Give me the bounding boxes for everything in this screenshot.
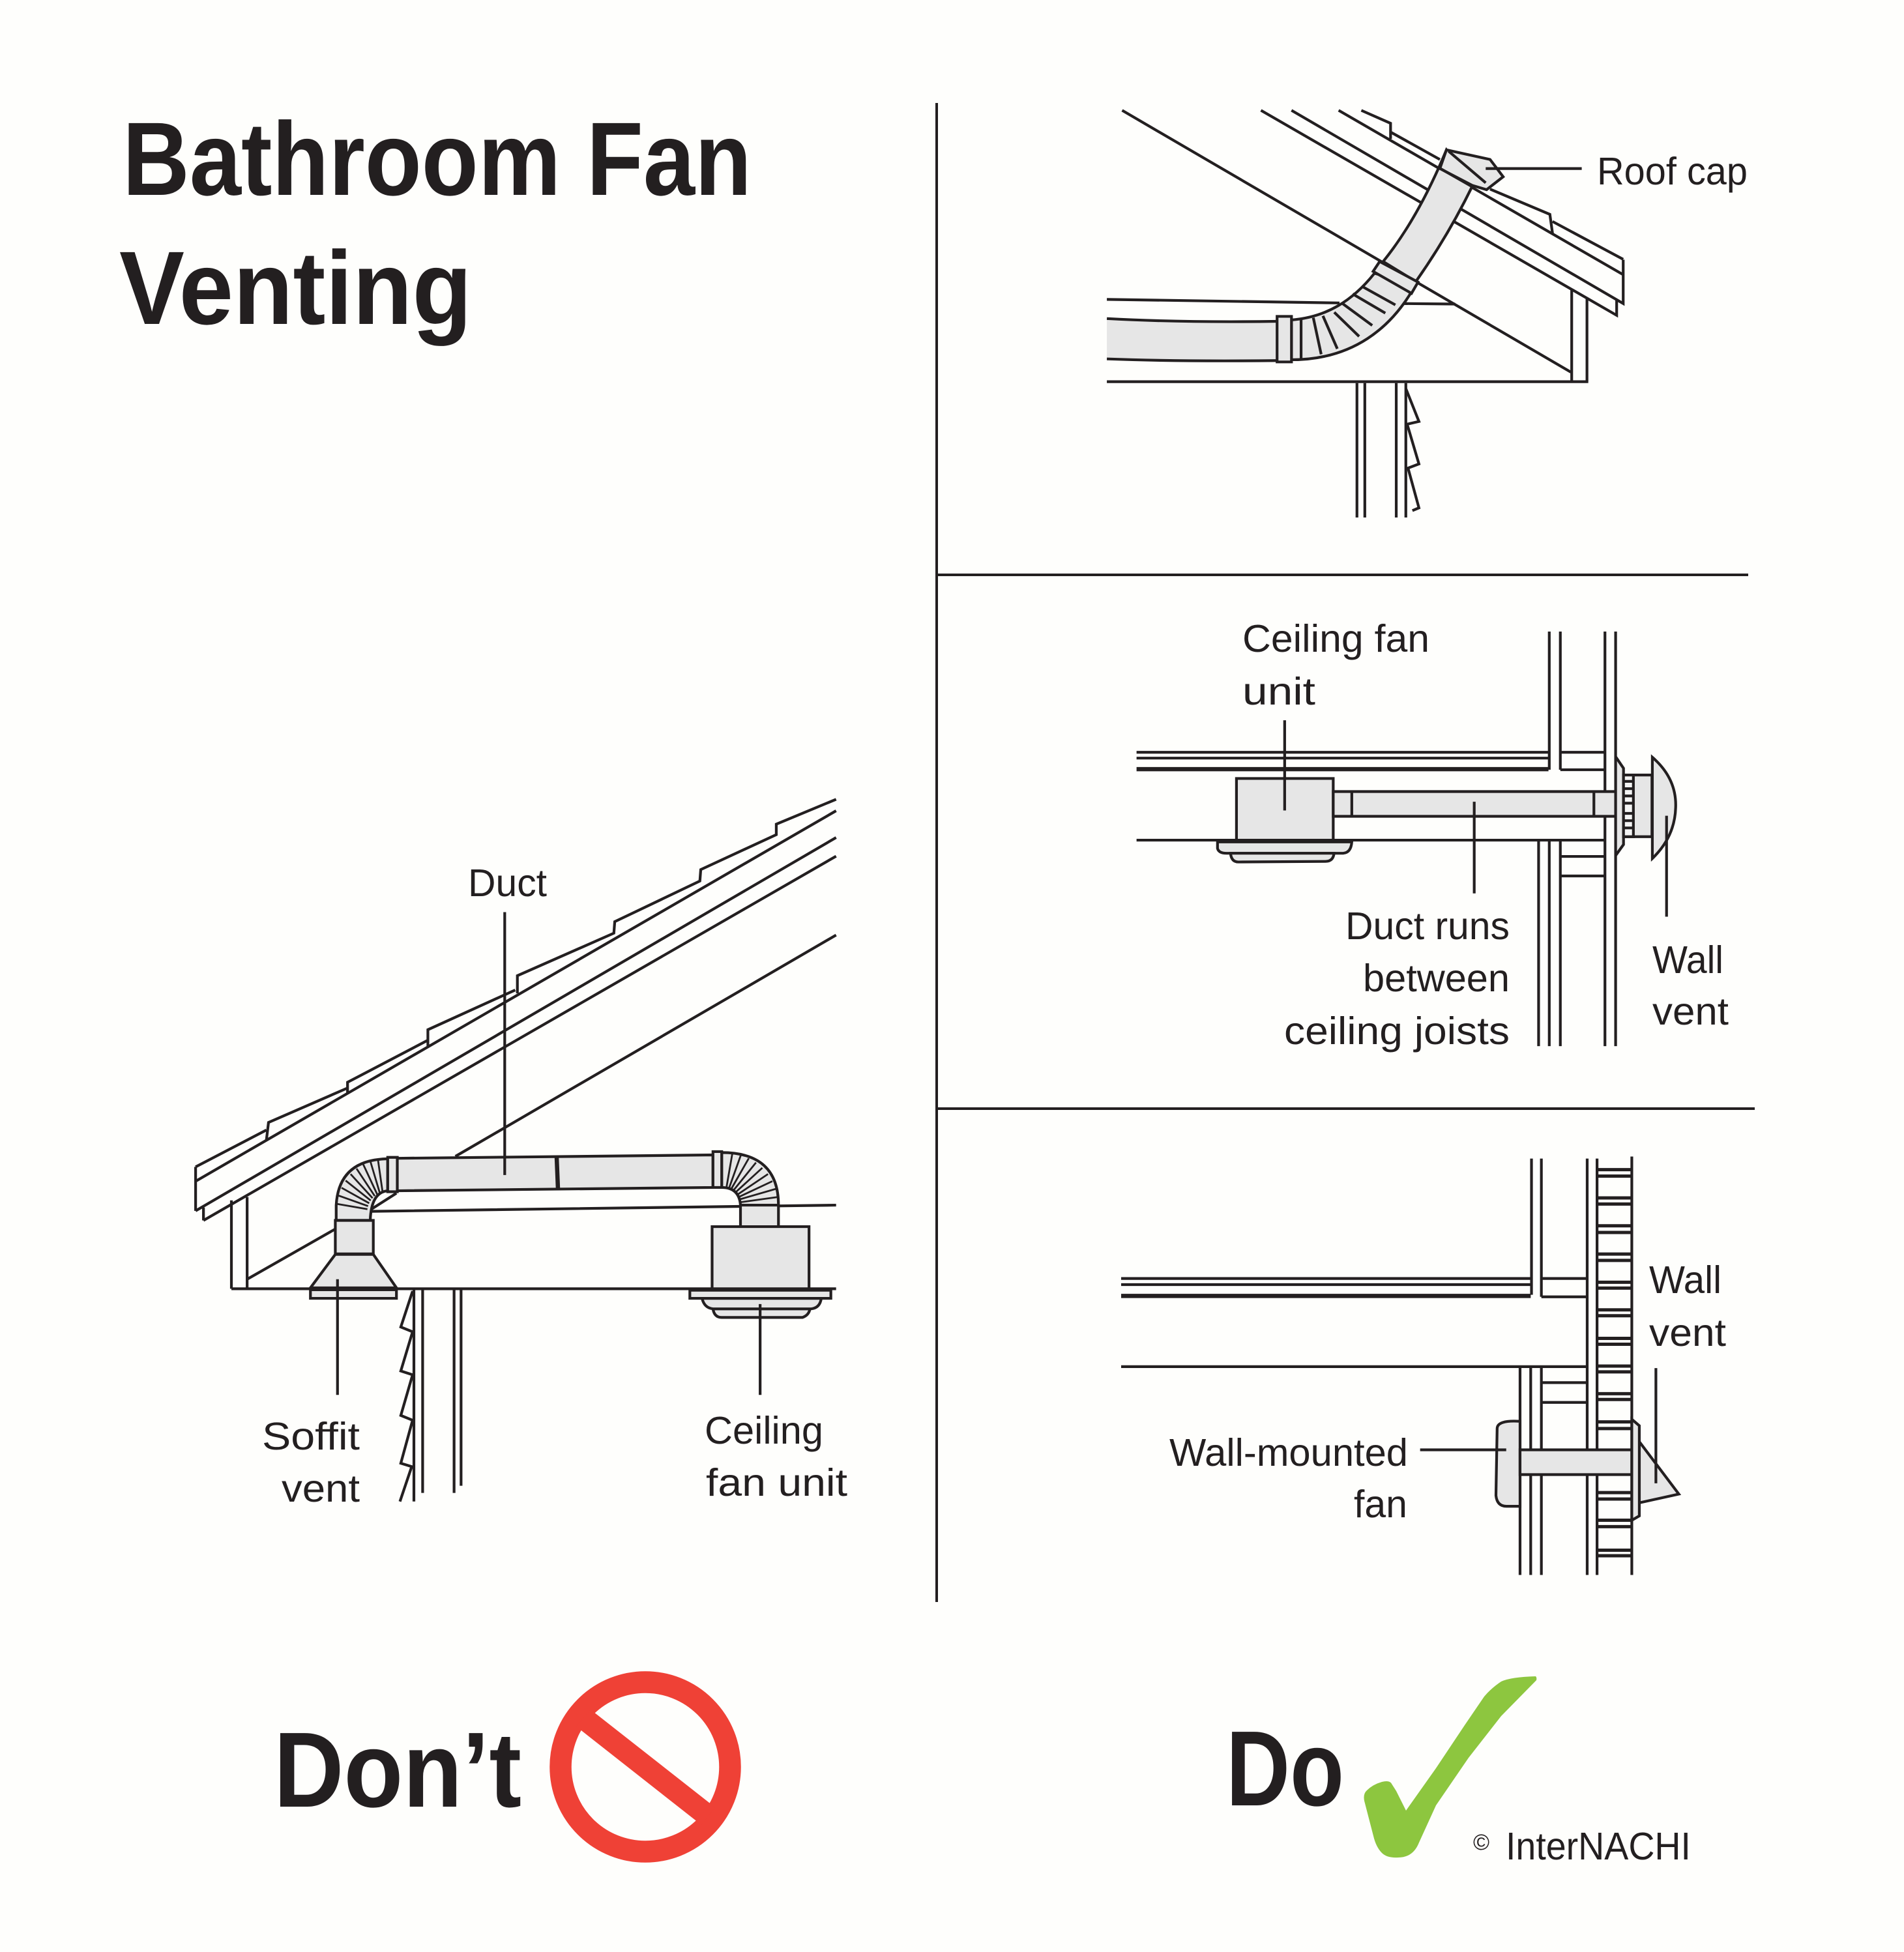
duct bbox=[1333, 792, 1616, 816]
label: duct runs between ceiling joists: Duct runs bbox=[1345, 905, 1510, 948]
leader lines bbox=[1285, 720, 1667, 916]
wall vent bbox=[1632, 1420, 1679, 1521]
label: ceiling fan unit: unit bbox=[1242, 670, 1315, 713]
leader line bbox=[1486, 167, 1582, 170]
leader lines bbox=[338, 912, 760, 1395]
soffit vent bbox=[310, 1221, 396, 1298]
label: duct runs between ceiling joists: ceiling joists bbox=[1284, 1010, 1510, 1053]
label: wall vent bbox=[1652, 939, 1729, 1033]
panel: do - wall vent diagram bbox=[1137, 617, 1729, 1053]
ceiling and wall lines bbox=[1121, 1157, 1632, 1575]
label: ceiling fan unit: Ceiling fan bbox=[1242, 617, 1429, 660]
icon: green check mark bbox=[1364, 1676, 1536, 1857]
duct with elbows bbox=[336, 1152, 778, 1227]
exterior wall and siding bbox=[1357, 383, 1419, 517]
label: roof cap: Roof cap bbox=[1597, 150, 1748, 193]
heading: don't: Don’t bbox=[274, 1710, 521, 1829]
label: wall-mounted fan: Wall-mounted bbox=[1169, 1431, 1408, 1474]
panel dividers bbox=[937, 103, 1755, 1602]
ceiling fan unit bbox=[690, 1227, 831, 1317]
label: wall vent: vent bbox=[1652, 990, 1729, 1033]
ceiling and wall lines bbox=[1137, 632, 1616, 1046]
label: wall-mounted fan: fan bbox=[1354, 1483, 1407, 1526]
copyright credit: © bbox=[1473, 1830, 1489, 1855]
copyright credit: InterNACHI bbox=[1506, 1825, 1691, 1868]
wall siding bbox=[1597, 1170, 1632, 1556]
duct and elbow bbox=[1107, 150, 1472, 362]
exterior wall and siding bbox=[400, 1290, 461, 1502]
ceiling fan unit bbox=[1218, 778, 1352, 862]
label: wall-mounted fan bbox=[1169, 1431, 1408, 1526]
label: soffit vent: vent bbox=[282, 1467, 360, 1510]
heading: do: Do bbox=[1226, 1709, 1344, 1828]
panel: don't - soffit vent diagram bbox=[196, 799, 847, 1510]
label: duct runs between ceiling joists: between bbox=[1363, 957, 1510, 1000]
label: duct: Duct bbox=[468, 862, 547, 905]
leader lines bbox=[1420, 1368, 1656, 1483]
label: wall vent: Wall bbox=[1649, 1259, 1721, 1302]
panel: do - roof cap diagram bbox=[1107, 110, 1748, 517]
label: ceiling fan unit: Ceiling bbox=[705, 1409, 823, 1452]
wall vent bbox=[1616, 757, 1676, 858]
label: wall vent: vent bbox=[1649, 1311, 1726, 1354]
label: ceiling fan unit: fan unit bbox=[706, 1461, 847, 1504]
roof structure bbox=[196, 799, 836, 1289]
title: Venting bbox=[119, 229, 472, 346]
title bbox=[119, 100, 752, 346]
panel: do - wall-mounted fan diagram bbox=[1121, 1157, 1726, 1575]
label: ceiling fan unit bbox=[1242, 617, 1429, 713]
title: Bathroom Fan bbox=[123, 100, 752, 217]
label: soffit vent: Soffit bbox=[262, 1415, 360, 1458]
label: soffit vent bbox=[262, 1415, 360, 1510]
label: duct runs between ceiling joists bbox=[1284, 905, 1510, 1053]
roof lines bbox=[1107, 110, 1623, 382]
label: wall vent: Wall bbox=[1652, 939, 1723, 982]
icon: prohibition sign bbox=[561, 1682, 730, 1852]
roof cap bbox=[1440, 150, 1503, 190]
label: wall vent bbox=[1649, 1259, 1726, 1354]
label: ceiling fan unit bbox=[705, 1409, 847, 1504]
wall-mounted fan bbox=[1496, 1421, 1632, 1506]
